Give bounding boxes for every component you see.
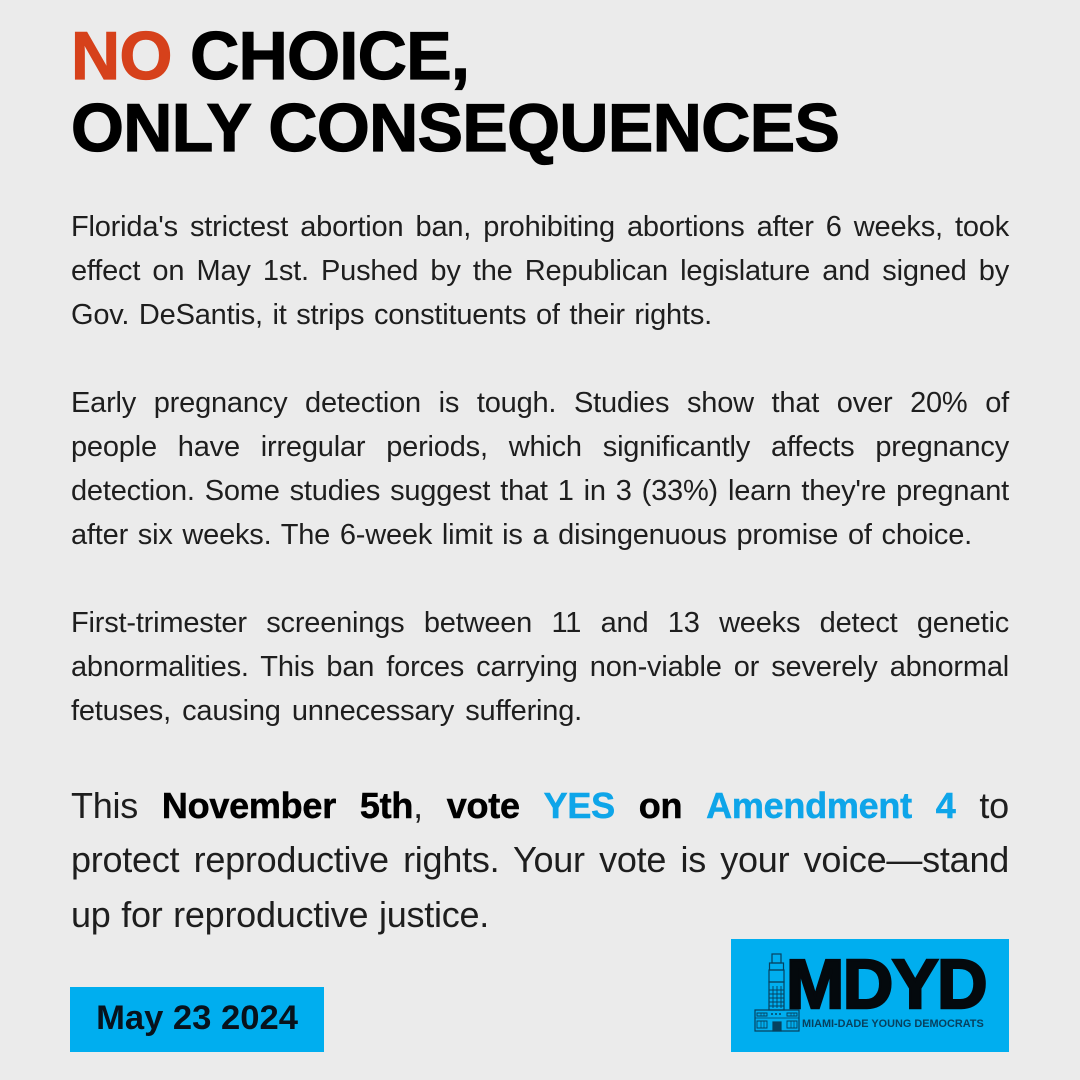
text block: first-trimester screenings: First-trimester screenings between 11 and 13 weeks detect genetic [71,607,1009,639]
call to action: up for reproductive justice. [71,894,489,935]
text block: early pregnancy detection: detection. Some studies suggest that 1 in 3 (33%) learn they're pregnant [71,475,1009,507]
logo tagline: MIAMI-DADE YOUNG DEMOCRATS [802,1018,984,1030]
text block: first-trimester screenings [71,607,1009,727]
logo: MDYD [731,939,1009,1052]
text block: first-trimester screenings: abnormalities. This ban forces carrying non-viable or severely abnormal [71,651,1009,683]
text block: early pregnancy detection: Early pregnancy detection is tough. Studies show that over 20% of [71,387,1009,419]
text block: first-trimester screenings: fetuses, causing unnecessary suffering. [71,695,582,727]
text block: early pregnancy detection: people have irregular periods, which significantly affects pregnancy [71,431,1009,463]
logo wordmark: MDYD [786,945,986,1023]
text block: ban overview: effect on May 1st. Pushed by the Republican legislature and signed by [71,255,1009,287]
call to action [71,785,1009,935]
call to action: This November 5th, vote YES on Amendment 4 to [71,785,1009,826]
text block: early pregnancy detection [71,387,1010,551]
call to action: protect reproductive rights. Your vote is your voice—stand [71,839,1009,880]
date badge: May 23 2024 [96,999,298,1037]
icon: clock tower building [754,953,800,1032]
title [71,18,839,166]
text block: ban overview [71,211,1010,331]
title: NO CHOICE, [71,18,469,94]
text block: ban overview: Florida's strictest abortion ban, prohibiting abortions after 6 weeks, took [71,211,1009,243]
text block: ban overview: Gov. DeSantis, it strips constituents of their rights. [71,299,712,331]
date badge [70,987,324,1052]
text block: early pregnancy detection: after six weeks. The 6-week limit is a disingenuous promise of choice. [71,519,972,551]
title: ONLY CONSEQUENCES [71,90,839,166]
